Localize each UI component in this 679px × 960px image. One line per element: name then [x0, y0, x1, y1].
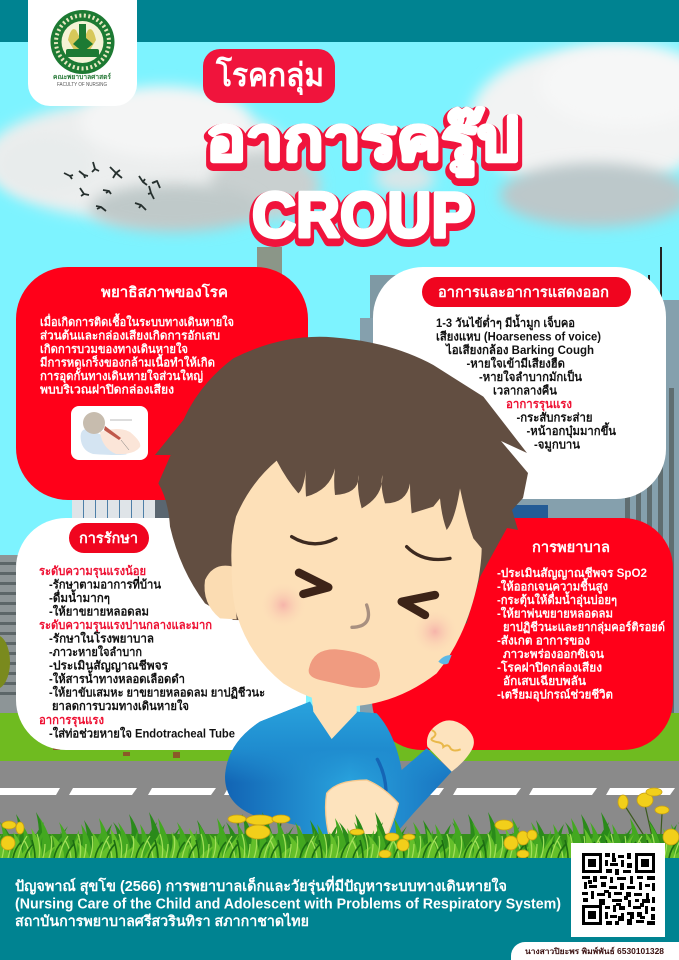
title pill: โรคกลุ่ม	[215, 56, 324, 96]
author pill: นางสาวปิยะพร พิมพ์พันธ์ 6530101328	[525, 946, 665, 956]
symptom list: เวลากลางคืน	[493, 384, 558, 398]
body text: ส่วนต้นและกล่องเสียงเกิดการอักเสบ	[40, 328, 220, 342]
panel: treatment	[16, 518, 306, 750]
body text	[40, 313, 234, 396]
nursing list: อักเสบเฉียบพลัน	[503, 674, 587, 688]
chimney	[257, 247, 282, 279]
symptom list: -หายใจลำบากมักเป็น	[479, 369, 583, 384]
nursing list: -โรคฝาปิดกล่องเสียง	[497, 660, 602, 674]
treatment list: ยาลดการบวมทางเดินหายใจ	[52, 698, 189, 713]
nursing list: -ประเมินสัญญาณชีพจร SpO2	[497, 566, 647, 580]
treatment list: ระดับความรุนแรงน้อย	[39, 564, 146, 579]
heading pill: อาการและอาการแสดงออก	[438, 285, 609, 301]
heading: พยาธิสภาพของโรค	[101, 283, 228, 301]
symptom list	[436, 314, 617, 452]
cloud behind title	[375, 162, 435, 194]
dandelion stems	[238, 805, 662, 858]
nursing list: -ให้ออกเจนความชื้นสูง	[497, 578, 608, 594]
heading: การพยาบาล	[532, 540, 610, 556]
citation text	[15, 875, 561, 930]
heading pill: การรักษา	[79, 531, 138, 547]
panel: nursing care	[372, 518, 673, 750]
sick boy character	[155, 337, 528, 840]
mouth	[309, 649, 380, 688]
teal footer band	[0, 858, 679, 960]
nursing list: -สังเกต อาการของ	[497, 634, 590, 648]
author pill	[511, 942, 679, 960]
sleeve crease	[377, 759, 386, 790]
road dashes	[0, 788, 675, 795]
treatment list: -ใส่ท่อช่วยหายใจ Endotracheal Tube	[49, 726, 235, 740]
body text: พบบริเวณฝาปิดกล่องเสียง	[40, 382, 174, 396]
right cloud	[470, 43, 679, 227]
title thai: อาการครู๊ป	[206, 106, 519, 177]
teal top band	[0, 0, 679, 42]
nursing list: -ให้ยาพ่นขยายหลอดลม	[497, 606, 613, 620]
nursing list: -เตรียมอุปกรณ์ช่วยชีวิต	[497, 688, 613, 702]
lawn	[0, 713, 679, 763]
birds flock	[64, 162, 160, 211]
title thai: อาการครู๊ป	[206, 110, 519, 181]
symptom list: -จมูกบาน	[534, 438, 581, 452]
road	[0, 761, 679, 858]
treatment list: -ให้สารน้ำทางหลอดเลือดดำ	[49, 670, 185, 686]
faculty label english: FACULTY OF NURSING	[57, 82, 107, 88]
QR code	[571, 843, 665, 937]
treatment list: -ให้ยาขับเสมหะ ยาขยายหลอดลม ยาปฏิชีวนะ	[49, 684, 265, 700]
treatment list: -รักษาในโรงพยาบาล	[49, 630, 154, 646]
citation text: ปัญจพาณ์ สุขโข (2566) การพยาบาลเด็กและวัยรุ่นที่มีปัญหาระบบทางเดินหายใจ	[15, 875, 507, 895]
logo seal	[50, 10, 114, 74]
window block behind boy	[72, 498, 180, 520]
title pill	[203, 49, 335, 103]
image: airway illustration	[71, 406, 148, 460]
title croup: CROUP	[252, 179, 472, 251]
neck	[312, 697, 357, 739]
body and arm	[225, 702, 452, 837]
treatment list: -ให้ยาขยายหลอดลม	[49, 604, 149, 618]
treatment list: -รักษาตามอาการที่บ้าน	[49, 576, 162, 592]
treatment list: ระดับความรุนแรงปานกลางและมาก	[39, 618, 212, 633]
body text: การอุดกั้นทางเดินหายใจส่วนใหญ่	[40, 367, 203, 384]
faculty label: คณะพยาบาลศาสตร์	[53, 72, 111, 81]
body text: เกิดการบวมของทางเดินหายใจ	[40, 341, 188, 356]
heading pill	[69, 523, 149, 553]
panel: pathophysiology	[16, 267, 308, 500]
body text: มีการหดเกร็งของกล้ามเนื้อทำให้เกิด	[40, 354, 215, 370]
symptom list: อาการรุนแรง	[506, 397, 572, 412]
grass border	[0, 810, 679, 858]
symptom list: -หน้าอกบุ๋มมากขึ้น	[526, 422, 617, 439]
treatment list: -ดื่มน้ำมากๆ	[49, 589, 110, 605]
symptom list: เสียงแหบ (Hoarseness of voice)	[436, 330, 601, 344]
hair back	[155, 337, 528, 623]
symptom list: -หายใจเข้ามีเสียงฮืด	[466, 356, 565, 370]
nursing list	[497, 566, 665, 702]
ear	[204, 566, 237, 619]
symptom list: -กระสับกระส่าย	[516, 410, 593, 424]
cheeks	[259, 581, 307, 629]
title croup: CROUP	[252, 183, 472, 255]
symptom list: ไอเสียงกล้อง Barking Cough	[444, 342, 594, 357]
tree trunks	[53, 745, 180, 758]
treatment list: -ประเมินสัญญาณชีพจร	[49, 658, 169, 672]
right tall building	[360, 247, 679, 720]
citation text: (Nursing Care of the Child and Adolescent with Problems of Respiratory System)	[15, 896, 561, 912]
body text: เมื่อเกิดการติดเชื้อในระบบทางเดินหายใจ	[40, 313, 234, 329]
nursing list: -กระตุ้นให้ดื่มน้ำอุ่นบ่อยๆ	[497, 591, 617, 608]
logo card	[28, 0, 137, 106]
heading pill	[422, 277, 631, 307]
treatment list	[39, 564, 265, 740]
shirt top shading	[225, 702, 452, 837]
treatment list: -ภาวะหายใจลำบาก	[49, 644, 142, 659]
treatment list: อาการรุนแรง	[39, 713, 104, 728]
dandelion flowers	[1, 788, 679, 858]
citation text: สถาบันการพยาบาลศรีสวรินทิรา สภากาชาดไทย	[15, 912, 309, 930]
nose	[352, 605, 368, 627]
face	[231, 461, 482, 706]
symptom list: 1-3 วันไข้ต่ำๆ มีน้ำมูก เจ็บคอ	[436, 314, 575, 331]
nursing list: ยาปฏิชีวนะและยากลุ่มคอร์ติรอยด์	[503, 620, 665, 635]
left windowed building	[0, 555, 25, 715]
panel: signs and symptoms	[373, 267, 666, 499]
raised fist	[427, 720, 474, 772]
eyes	[299, 573, 435, 615]
nursing list: ภาวะพร่องออกซิเจน	[503, 647, 605, 661]
sky background	[0, 42, 679, 762]
hand on chest	[326, 780, 398, 840]
left cloud	[0, 86, 320, 232]
eyebrows	[292, 537, 450, 559]
tear	[438, 655, 452, 664]
